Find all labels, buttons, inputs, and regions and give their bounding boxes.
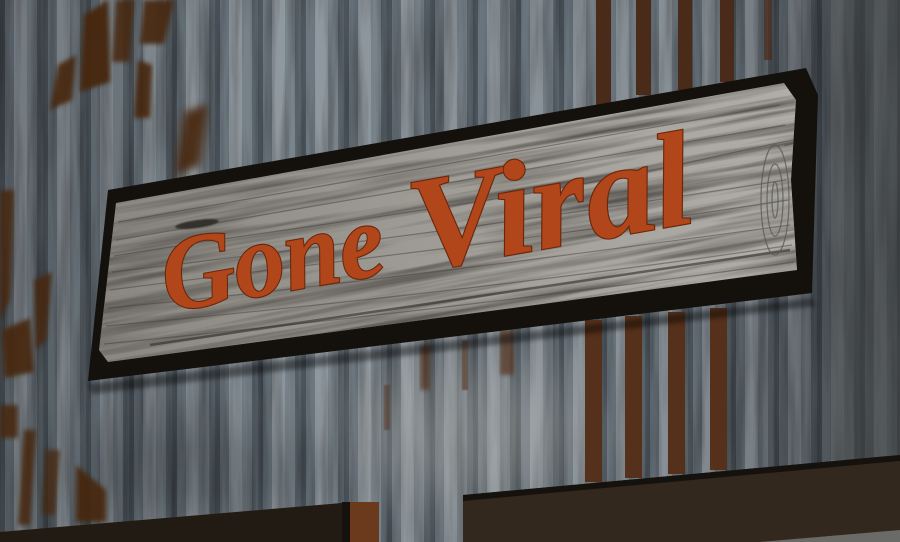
- knot in wood: [175, 217, 219, 231]
- wooden plank: [99, 83, 797, 362]
- sign frame: [88, 68, 818, 381]
- sign shadow: [88, 298, 816, 394]
- vertical rust streaks above the sign: [596, 0, 772, 105]
- sign text: Gone Viral: [152, 104, 704, 335]
- rust patches on the wall: [0, 0, 208, 525]
- end grain swirl: [761, 145, 789, 255]
- word: Gone: Gone: [152, 181, 393, 335]
- word: Viral: Viral: [397, 104, 704, 300]
- dark wooden boards at the bottom: [0, 455, 900, 542]
- sign: [88, 68, 818, 396]
- wood grain: [100, 83, 797, 362]
- vertical rust streaks below the sign: [384, 308, 727, 482]
- dark lower crack: [150, 250, 790, 345]
